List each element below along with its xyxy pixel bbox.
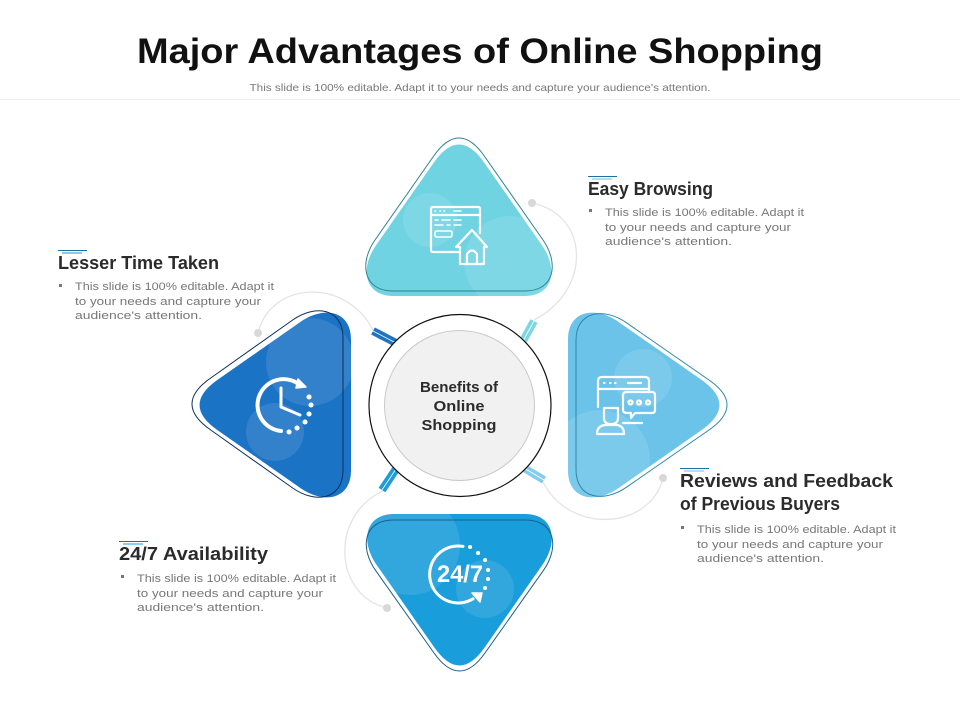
text block: easy browsing: Easy Browsing: [588, 179, 713, 199]
panel: left triangle, lesser time taken: [192, 311, 354, 497]
text block: 24/7 availability: audience's attention.: [137, 602, 264, 614]
text block: lesser time taken: [58, 250, 274, 322]
center label: Online: [434, 399, 484, 415]
icon: 24/7 clock: 24/7: [437, 561, 483, 588]
icon: browser window with chat bubble and user: [597, 377, 655, 434]
icon: 24/7 clock: [430, 546, 488, 603]
text block: lesser time taken: to your needs and capture your: [75, 296, 261, 308]
icon: browser window with house: [431, 207, 487, 264]
center label: [420, 380, 498, 434]
text block: lesser time taken: This slide is 100% editable. Adapt it: [75, 281, 274, 293]
title: Major Advantages of Online Shopping: [137, 32, 823, 71]
text block: reviews and feedback: [680, 468, 896, 565]
panel: right triangle, reviews and feedback: [568, 312, 728, 498]
center label: Shopping: [422, 418, 496, 434]
text block: 24/7 availability: This slide is 100% editable. Adapt it: [137, 573, 336, 585]
radial connector bars: [373, 321, 544, 490]
text block: reviews and feedback: Reviews and Feedback: [680, 471, 894, 491]
text block: reviews and feedback: to your needs and capture your: [697, 539, 883, 551]
subtitle: This slide is 100% editable. Adapt it to your needs and capture your audience's attention.: [250, 82, 710, 94]
text block: 24/7 availability: [119, 542, 336, 614]
text block: 24/7 availability: 24/7 Availability: [119, 544, 268, 564]
text block: reviews and feedback: This slide is 100% editable. Adapt it: [697, 524, 896, 536]
text block: 24/7 availability: to your needs and capture your: [137, 588, 323, 600]
panel: bottom triangle, 24/7 availability: [366, 514, 554, 672]
panel: top triangle, easy browsing: [366, 138, 556, 308]
text block: lesser time taken: Lesser Time Taken: [58, 253, 219, 273]
text block: reviews and feedback: audience's attention.: [697, 553, 824, 565]
text block: easy browsing: [588, 176, 804, 248]
icon: clock with arrow: [258, 379, 311, 432]
connector arcs and dots: [254, 199, 667, 612]
text block: lesser time taken: audience's attention.: [75, 310, 202, 322]
text block: easy browsing: This slide is 100% editable. Adapt it: [605, 207, 804, 219]
text block: easy browsing: to your needs and capture your: [605, 222, 791, 234]
text block: reviews and feedback: of Previous Buyers: [680, 494, 840, 514]
center circle: [369, 314, 551, 496]
center label: Benefits of: [420, 380, 498, 396]
text block: easy browsing: audience's attention.: [605, 236, 732, 248]
